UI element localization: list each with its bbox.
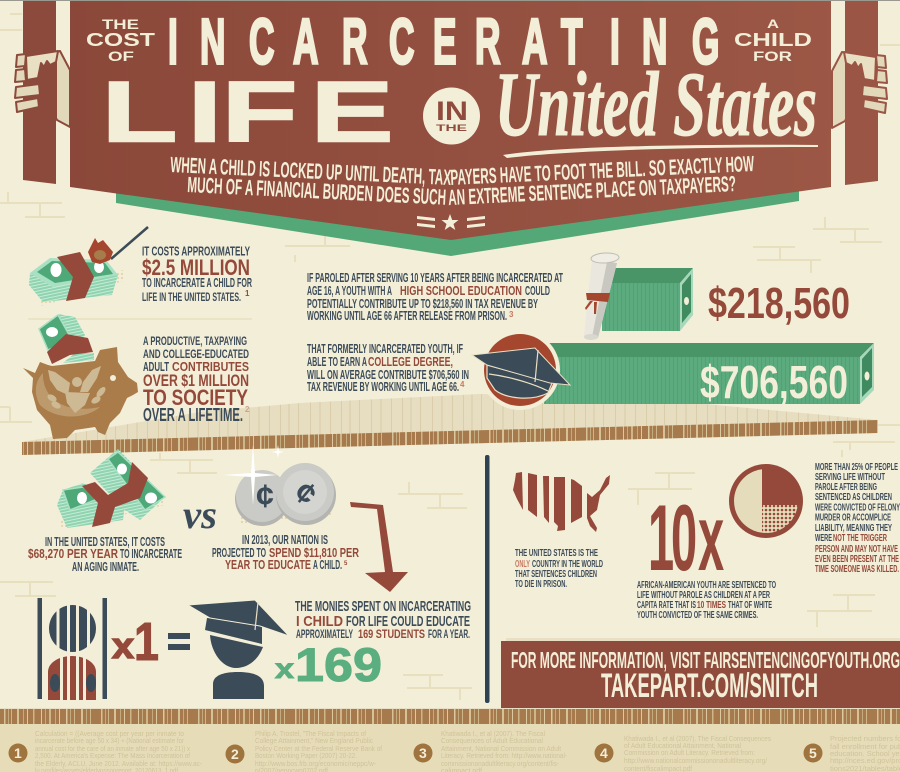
- label: x169: 169: [295, 638, 382, 691]
- subtitle: MUCH OF A FINANCIAL BURDEN DOES SUCH AN EXTREME SENTENCE PLACE ON TAXPAYERS?: [188, 176, 736, 206]
- equals sign: [168, 633, 190, 650]
- footnote 5: [804, 734, 900, 772]
- right pillar: [845, 1, 878, 185]
- footnote 1: [8, 729, 202, 772]
- text: college degree paragraph: ABLE TO EARN A: [307, 355, 367, 369]
- badge: in the: THE: [436, 123, 467, 134]
- text: ten times: YOUTH CONVICTED OF THE SAME CRIMES.: [637, 610, 758, 621]
- text: education cost per year: PROJECTED TO: [212, 546, 266, 560]
- title: life: LIFE: [102, 64, 394, 160]
- text: incarceration cost per year: AN AGING INMATE.: [72, 560, 139, 574]
- panel: facts: [513, 462, 900, 621]
- panel: tax revenue comparison: [307, 252, 874, 410]
- text: 2.5 million: TO INCARCERATE A CHILD FOR: [142, 275, 252, 290]
- text: ten times: AFRICAN-AMERICAN YOUTH ARE SENTENCED TO: [637, 580, 776, 591]
- footnote 1: Calculation = ((Average cost per year per inmate to: [35, 729, 184, 738]
- text: monies spent: THE MONIES SPENT ON INCARCERATING: [295, 598, 471, 615]
- text: 2.5 million: LIFE IN THE UNITED STATES.: [142, 290, 241, 304]
- text: college degree paragraph: COLLEGE DEGREE,: [368, 355, 453, 369]
- label: vs: vs: [183, 492, 217, 537]
- text: incarceration cost per year: [28, 535, 182, 574]
- panel: incarceration versus education: [28, 445, 471, 700]
- title: incarcerating: INCARCERATING: [168, 5, 719, 77]
- icon: left fist: [15, 51, 70, 127]
- text: only country: COUNTRY IN THE WORLD: [532, 559, 603, 570]
- text: 2.5 million: 1: [245, 289, 250, 298]
- footnote 3: commissiononadultliteracy.org/content/fis-: [441, 759, 559, 768]
- text: education cost per year: A CHILD.: [313, 558, 342, 572]
- title: the cost of: COST: [86, 30, 155, 50]
- panel: header banner: [14, 1, 888, 256]
- value: 218,560: $218,560: [708, 279, 850, 328]
- text: 2.5 million: [142, 244, 252, 304]
- icon: diploma scroll: [584, 252, 619, 340]
- text: felony murder: [815, 462, 900, 575]
- icon: child behind bars: [38, 598, 107, 700]
- left pillar: [23, 1, 56, 184]
- text: high school paragraph: 3: [509, 310, 514, 319]
- icon: coins with sparkle: [223, 445, 336, 526]
- text: college degree paragraph: TAX REVENUE BY WORKING UNTIL AGE 66.: [307, 380, 459, 394]
- footnote 4: of Adult Educational Attainment, National: [624, 741, 741, 750]
- panel: call to action: [501, 638, 900, 709]
- footnote 2: Policy Center at the Federal Reserve Bank of: [255, 744, 383, 753]
- panel: wooden shelf: [22, 394, 878, 455]
- value: 706,560: $706,560: [700, 356, 848, 408]
- footnote 3: Literacy. Retrieved from: http://www.national-: [441, 751, 567, 760]
- text: ten times: THAT OF WHITE: [728, 600, 772, 611]
- text: education cost per year: [212, 533, 359, 572]
- footnote 2: College Attainment," New England Public: [255, 736, 373, 745]
- stat: 10x: 10x: [648, 485, 724, 590]
- footnote 1: annual cost for the care of an inmate after age 50 x 21)) x: [35, 744, 190, 753]
- text: high school paragraph: POTENTIALLY CONTRIBUTE UP TO $218,560 IN TAX REVENUE BY: [307, 297, 538, 311]
- text: monies spent: APPROXIMATELY: [296, 627, 353, 641]
- footnote 4: http://www.nationalcommissiononadultliteracy.org/: [624, 756, 768, 765]
- title: the cost of: OF: [108, 49, 134, 64]
- icon: eagle seal: [46, 366, 107, 413]
- title: the cost of: THE: [102, 16, 139, 32]
- text: college degree paragraph: THAT FORMERLY INCARCERATED YOUTH, IF: [307, 342, 463, 356]
- footnote 2: http://www.bos.frb.org/economic/neppc/w-: [255, 759, 376, 768]
- text: felony murder: WERE: [815, 533, 832, 544]
- text: education cost per year: SPEND $11,810 PER: [269, 546, 359, 560]
- title: a child for: FOR: [753, 49, 792, 64]
- badge: in the: IN: [436, 96, 468, 126]
- chart: high school green block: [602, 268, 693, 331]
- text: contributes over 1 million: CONTRIBUTES: [172, 359, 249, 374]
- label: x1: 1: [134, 612, 159, 672]
- title: a child for: [734, 17, 812, 64]
- text: high school paragraph: HIGH SCHOOL EDUCATION: [400, 284, 522, 298]
- text: college degree paragraph: [307, 342, 469, 394]
- banner shape: [70, 1, 831, 240]
- text: contributes over 1 million: TO SOCIETY: [143, 385, 248, 410]
- icon: money pile: [57, 449, 165, 529]
- text: contributes over 1 million: [143, 334, 250, 425]
- icon: striped us map: [513, 472, 610, 532]
- footnote 3: Khatiwada I., et al (2007). The Fiscal: [441, 729, 545, 738]
- text: contributes over 1 million: 2: [245, 405, 250, 414]
- footnote 5: 5: [809, 745, 817, 761]
- footnote 4: Commission on Adult Literacy. Retrieved from:: [624, 748, 755, 757]
- text: ten times: CAPITA RATE THAT IS: [637, 600, 696, 611]
- text: contributes over 1 million: OVER $1 MILLION: [143, 371, 249, 390]
- text: ten times: LIFE WITHOUT PAROLE AS CHILDREN AT A PER: [637, 590, 770, 601]
- text: education cost per year: IN 2013, OUR NATION IS: [242, 533, 328, 547]
- text: education cost per year: 5: [344, 561, 348, 567]
- text: college degree paragraph: 4: [460, 380, 465, 389]
- text: only country: ONLY: [515, 559, 530, 570]
- text: education cost per year: YEAR TO EDUCATE: [225, 558, 311, 572]
- text: only country: [515, 548, 603, 590]
- text: high school paragraph: WORKING UNTIL AGE 66 AFTER RELEASE FROM PRISON.: [307, 309, 507, 323]
- icon: coins with sparkle: ¢: [288, 473, 325, 513]
- icon: money stack burning: [29, 227, 148, 306]
- text: monies spent: 169 STUDENTS: [358, 627, 425, 641]
- text: ten times: [637, 580, 776, 621]
- label: x169: x: [275, 653, 295, 684]
- text: monies spent: FOR A YEAR.: [428, 627, 470, 641]
- footnote 3: Consequences of Adult Educational: [441, 736, 543, 745]
- text: contributes over 1 million: ADULT: [143, 359, 169, 374]
- vertical divider: [485, 455, 490, 703]
- text: incarceration cost per year: IN THE UNITED STATES, IT COSTS: [45, 535, 165, 549]
- title: a child for: A: [767, 17, 779, 31]
- text: monies spent: I CHILD: [296, 613, 343, 630]
- label: x1: [112, 612, 159, 672]
- label: x1: x: [112, 625, 134, 666]
- icon: right fist: [832, 52, 887, 128]
- text: 2.5 million: $2.5 MILLION: [142, 255, 250, 280]
- footnote 3: [414, 729, 567, 772]
- footnote 1: the Elderly, ACLU, June 2012. Available at: https://www.ac-: [35, 759, 202, 768]
- footnote 2: 2: [231, 746, 239, 762]
- icon: graduation cap on red circle: [472, 330, 570, 410]
- text: only country: THE UNITED STATES IS THE: [515, 548, 598, 559]
- text: high school paragraph: AGE 16, A YOUTH WITH A: [307, 284, 392, 298]
- text: incarceration cost per year: $68,270 PER YEAR: [28, 547, 118, 561]
- footnote 1: incarcerate before age 50 x 34) + (National estimate for: [35, 736, 184, 745]
- star divider: [417, 214, 485, 230]
- icon: coins with sparkle: ¢: [256, 478, 274, 514]
- footnote 1: 1: [14, 745, 22, 761]
- text: high school paragraph: COULD: [525, 284, 550, 298]
- text: monies spent: FOR LIFE COULD EDUCATE: [346, 613, 470, 630]
- footnote 3: Attainment, National Commission on Adult: [441, 744, 562, 753]
- arrow: down to equation: [350, 502, 408, 592]
- text: only country: THAT SENTENCES CHILDREN: [515, 569, 597, 580]
- text: only country: TO DIE IN PRISON.: [515, 579, 567, 590]
- panel: cost of incarceration: [23, 227, 252, 439]
- icon: graduate: [188, 600, 289, 699]
- text: high school paragraph: [307, 271, 563, 323]
- icon: match and flame: [88, 227, 148, 264]
- text: monies spent: [295, 598, 471, 641]
- text: ten times: 10 TIMES: [697, 600, 726, 611]
- badge: in the: [423, 88, 480, 144]
- footnote 2: Philip A. Trostel, "The Fiscal Impacts of: [255, 729, 367, 738]
- footnote 2: [226, 729, 383, 772]
- footnote 4: [594, 734, 771, 772]
- title: the cost of: [86, 16, 155, 64]
- script underline: [503, 145, 818, 158]
- subtitle: WHEN A CHILD IS LOCKED UP UNTIL DEATH, TAXPAYERS HAVE TO FOOT THE BILL. SO EXACTLY HOW: [170, 156, 754, 188]
- icon: piggy bank with money: [23, 314, 138, 439]
- chart: college green block: [544, 343, 874, 404]
- text: high school paragraph: IF PAROLED AFTER SERVING 10 YEARS AFTER BEING INCARCERATED AT: [307, 271, 563, 285]
- chart: pie 25 percent: [729, 464, 806, 538]
- text: contributes over 1 million: AND COLLEGE-EDUCATED: [143, 347, 249, 361]
- footnote 4: Khatiwada I., et al (2007). The Fiscal Consequences: [624, 734, 771, 743]
- footnote 2: Boston Working Paper (2007) 20-22.: [255, 751, 357, 760]
- text: 2.5 million: IT COSTS APPROXIMATELY: [142, 244, 250, 258]
- text: incarceration cost per year: TO INCARCERATE: [120, 547, 182, 561]
- text: contributes over 1 million: A PRODUCTIVE, TAXPAYING: [143, 334, 247, 348]
- title: a child for: CHILD: [734, 30, 812, 50]
- text: contributes over 1 million: OVER A LIFETIME.: [143, 404, 243, 425]
- green banner shadow: [116, 190, 799, 256]
- subtitle: [170, 156, 754, 206]
- text: college degree paragraph: WILL ON AVERAGE CONTRIBUTE $706,560 IN: [307, 368, 469, 382]
- footnote 1: 2,500. At America's Expense: The Mass Incarceration of: [35, 751, 191, 760]
- footnote 4: 4: [600, 745, 608, 761]
- footnote 3: 3: [419, 745, 427, 761]
- panel: footnotes: [0, 708, 900, 772]
